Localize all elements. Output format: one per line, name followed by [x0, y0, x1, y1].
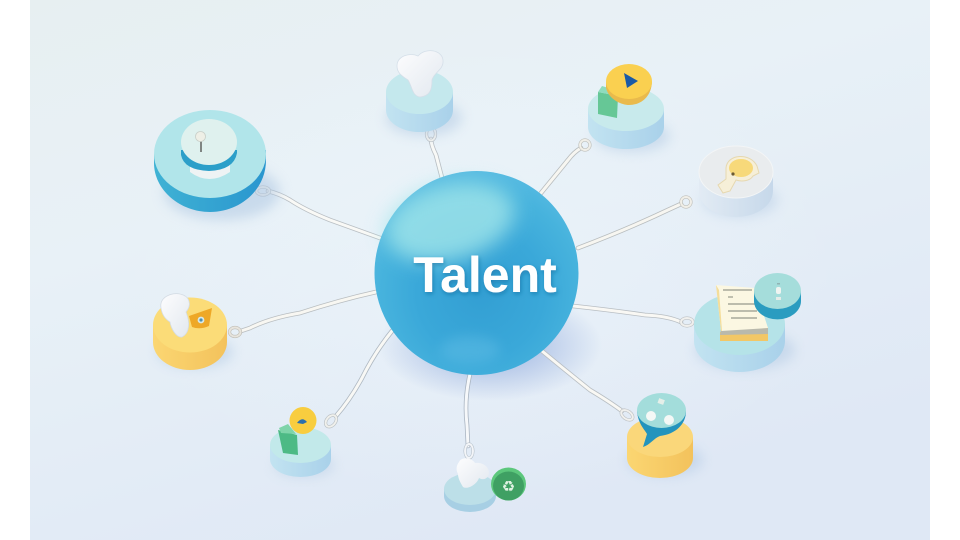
node: document and badge disk: [694, 273, 801, 372]
title: Talent: [413, 247, 557, 303]
node: play button disk: [588, 64, 670, 152]
icon: yellow play disc: [606, 64, 652, 105]
connector: right upper: [578, 197, 691, 248]
connector: bottom: [465, 374, 473, 458]
icon: white figure: [161, 294, 189, 337]
connector: left: [230, 292, 376, 336]
icon: document: [716, 285, 768, 341]
connector: lower right: [542, 351, 635, 422]
central sphere: Talent: [374, 169, 578, 375]
icon: orange tag: [189, 308, 212, 328]
icon: green recycle badge: ♻: [502, 478, 515, 496]
icon: yellow ring: [718, 156, 759, 193]
node: bottom disk with figure and green badge: [444, 458, 526, 512]
connector: upper left: [256, 187, 380, 238]
node: white disk with yellow ring: [699, 146, 778, 217]
connector: right lower: [573, 306, 693, 326]
node: top disk with cloud: [386, 51, 462, 136]
icon: green box: [278, 424, 298, 455]
icon: teal badge: [754, 273, 801, 319]
connector: upper right near: [541, 140, 590, 193]
node: large teal disk with pin: [154, 110, 280, 220]
node: yellow disk with cloud: [153, 294, 233, 370]
node: yellow disk with speech bubble: [627, 393, 703, 478]
icon: yellow ball: [290, 407, 316, 434]
icon: pedestal with pin: [181, 119, 237, 179]
icon: white figure: [457, 458, 489, 488]
icon: green box: [598, 92, 618, 118]
sphere shadow: [378, 289, 602, 401]
icon: speech bubble: [637, 393, 686, 447]
connector: top: [426, 128, 442, 178]
icon: white cloud: [397, 51, 443, 97]
connector: lower left: [323, 331, 392, 429]
node: small disk with yellow ball: [270, 407, 334, 477]
